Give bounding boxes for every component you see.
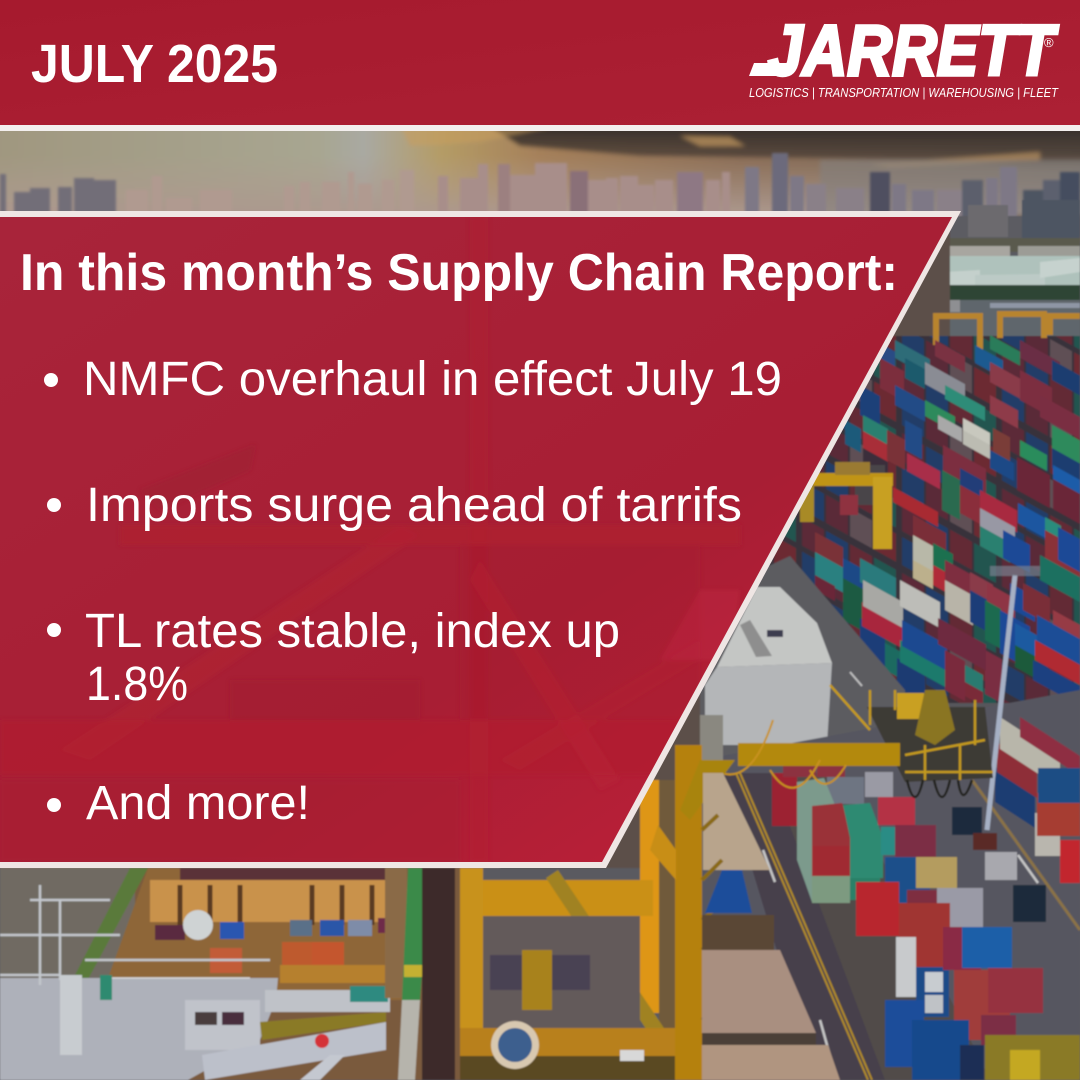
bullet: NMFC overhaul: NMFC overhaul in effect July 19	[83, 353, 782, 406]
bullet: TL rates: 1.8%	[86, 658, 188, 711]
faint photo showing through the panel	[66, 598, 735, 777]
lower yard containers	[772, 763, 1080, 1080]
logo: Jarrett: ®	[1044, 35, 1054, 50]
header bar	[0, 0, 1080, 131]
container stacks upper yard	[845, 335, 1080, 592]
container stacks mid yard	[815, 465, 1080, 706]
bullet: imports surge: Imports surge ahead of tarrifs	[86, 479, 742, 532]
distant low city and warehouses	[905, 200, 1080, 340]
bullet: and more: And more!	[86, 777, 310, 830]
grey pavement	[700, 556, 1080, 760]
yellow crane	[455, 685, 993, 1080]
bullet: TL rates	[47, 605, 620, 711]
panel: report highlights	[0, 211, 961, 868]
right side containers and cars	[952, 566, 1080, 922]
white warehouse building	[705, 587, 832, 745]
ship with cargo bay	[0, 868, 460, 1080]
gantry cranes far	[936, 314, 1080, 352]
bullet: TL rates: TL rates stable, index up	[85, 605, 620, 658]
panel heading: In this month’s Supply Chain Report:	[20, 244, 898, 302]
sky	[0, 120, 1080, 241]
road and deck below crane	[450, 870, 840, 1080]
lower yard base	[700, 690, 1080, 1080]
date heading: JULY 2025	[31, 34, 278, 94]
left harbour under the panel	[0, 218, 950, 868]
gantry crane mid yard	[800, 462, 893, 549]
container yard	[700, 336, 1080, 1080]
city skyline	[0, 153, 1080, 236]
